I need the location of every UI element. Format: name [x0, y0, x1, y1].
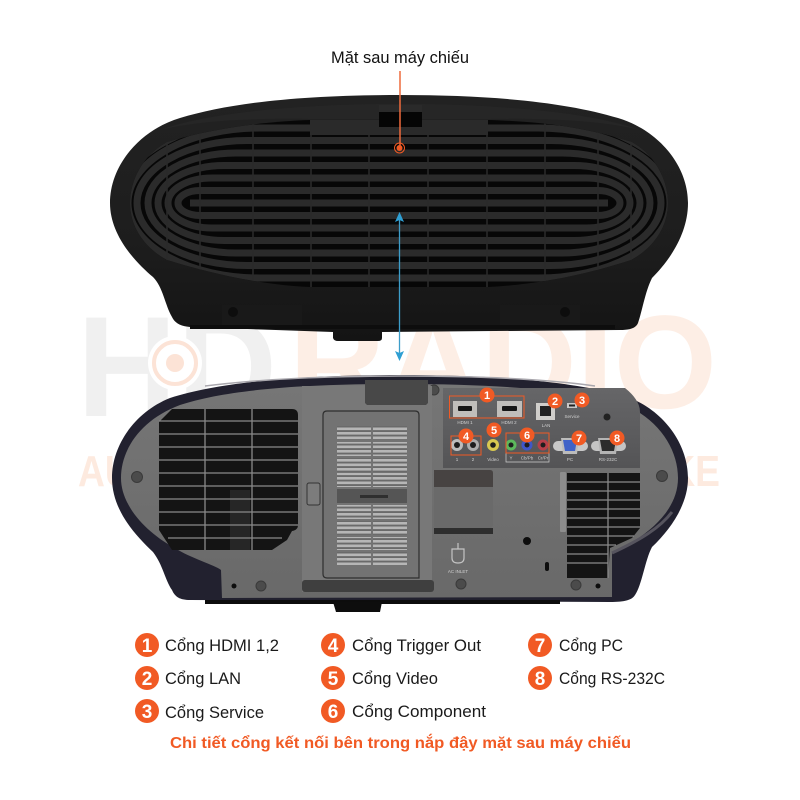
foot	[333, 602, 382, 612]
legend item 7	[528, 633, 623, 657]
filter cover panel	[302, 386, 434, 592]
component jacks: Y	[509, 456, 513, 460]
blue double arrow	[395, 212, 404, 361]
PC port	[553, 438, 588, 462]
port number badges: 3	[579, 395, 585, 407]
title label: Mặt sau máy chiếu	[331, 48, 469, 67]
rim highlight	[205, 376, 595, 386]
legend item 3	[135, 699, 264, 723]
port number badges: 6	[524, 430, 530, 442]
watermark: target	[148, 336, 202, 390]
bottom black edge	[205, 600, 560, 604]
watermark: RADIO: RADIO	[289, 289, 717, 437]
right vent	[560, 472, 640, 578]
HDMI highlight box	[450, 396, 524, 418]
legend item 4: Cổng Trigger Out	[352, 636, 481, 655]
shell	[112, 375, 688, 602]
video jack: Video	[487, 457, 499, 462]
legend item 8	[528, 666, 665, 690]
legend item 6	[321, 699, 486, 723]
lower right shell accent	[612, 512, 672, 553]
orange pointer line	[394, 71, 404, 153]
icon: AC inlet	[448, 543, 468, 574]
icon: AC inlet: AC INLET	[448, 569, 468, 574]
legend item 3: Cổng Service	[165, 703, 264, 722]
trigger highlight box	[451, 436, 481, 455]
filter slats	[337, 426, 407, 565]
top band	[160, 104, 640, 130]
legend item 4: 4	[328, 636, 339, 657]
projector: rear face, cover closed	[110, 95, 688, 341]
small holes	[232, 537, 600, 588]
LAN port: LAN	[542, 423, 550, 428]
port number badges	[458, 388, 624, 446]
HDMI 2 port	[497, 401, 522, 425]
legend item 5: 5	[328, 669, 339, 690]
legend item 6: Cổng Component	[352, 702, 486, 721]
legend item 2: 2	[142, 669, 152, 690]
Service port	[564, 403, 580, 419]
component jacks	[506, 440, 549, 462]
LAN port	[536, 403, 555, 428]
lower feet and screws	[190, 305, 615, 329]
port number badges: 7	[576, 433, 582, 445]
legend item 3: 3	[142, 702, 152, 723]
trigger out jacks: 1	[456, 457, 459, 462]
cover notch	[379, 105, 422, 127]
legend item 5	[321, 666, 438, 690]
legend item 2	[135, 666, 241, 690]
watermark: HD: HD	[77, 288, 277, 447]
legend item 1: Cổng HDMI 1,2	[165, 636, 279, 655]
legend item 2: Cổng LAN	[165, 669, 241, 688]
port number badges: 4	[463, 431, 470, 443]
component jacks: Cb/Pb	[521, 456, 534, 460]
legend item 6: 6	[328, 702, 338, 723]
port number badges: 5	[491, 425, 497, 437]
RS-232C port: RS-232C	[599, 457, 618, 462]
legend	[135, 633, 665, 723]
vent grille	[130, 120, 668, 287]
component jacks: Cr/Pr	[538, 456, 549, 460]
Service port: Service	[564, 414, 580, 419]
component highlight box	[506, 433, 549, 453]
cover latch	[365, 380, 428, 405]
legend item 8: Cổng RS-232C	[559, 669, 665, 688]
legend item 1	[135, 633, 279, 657]
legend item 7: Cổng PC	[559, 636, 623, 655]
screws on plate	[132, 385, 668, 591]
panel screw	[604, 414, 610, 420]
projector body outline	[110, 95, 688, 341]
left vent	[159, 409, 298, 550]
ports panel	[443, 388, 640, 468]
legend item 5: Cổng Video	[352, 669, 438, 688]
legend item 1: 1	[142, 636, 153, 657]
legend item 8: 8	[535, 669, 545, 690]
HDMI 1 port	[453, 401, 477, 425]
RS-232C port	[591, 438, 626, 462]
port number badges: 2	[552, 396, 558, 408]
HDMI 2 port: HDMI 2	[501, 420, 517, 425]
projector: rear face, ports exposed	[112, 375, 688, 612]
watermark	[77, 288, 720, 496]
PC port: PC	[567, 457, 574, 462]
caption: Chi tiết cổng kết nối bên trong nắp đậy mặt sau máy chiếu	[170, 733, 631, 752]
port number badges: 1	[484, 390, 490, 402]
gray rear plate	[121, 384, 678, 598]
HDMI 1 port: HDMI 1	[457, 420, 473, 425]
trigger out jacks: 2	[472, 457, 475, 462]
AC block	[434, 470, 493, 534]
video jack	[487, 439, 499, 462]
legend item 7: 7	[535, 636, 545, 657]
panel background	[443, 388, 640, 468]
legend item 4	[321, 633, 481, 657]
port number badges: 8	[614, 433, 620, 445]
trigger out jacks	[451, 439, 479, 462]
